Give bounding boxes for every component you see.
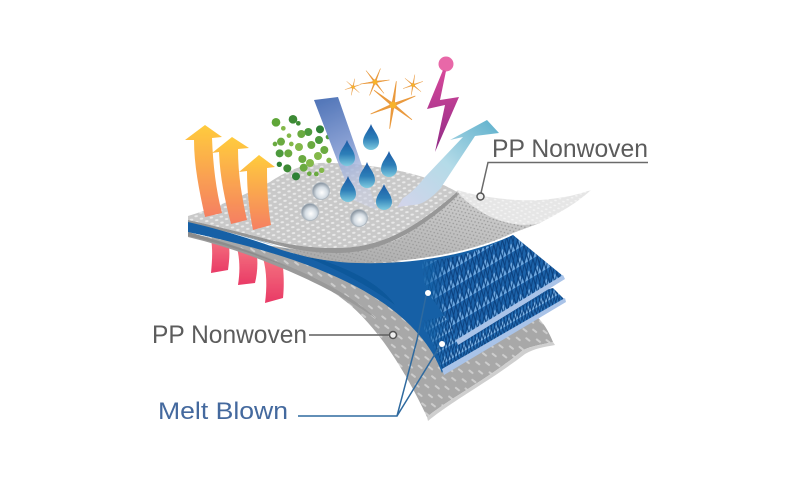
upper melt blown sheet	[423, 235, 565, 345]
icon: blue beam	[314, 97, 377, 210]
arrows: heat rising above the fabric	[185, 125, 275, 230]
callout: PP Nonwoven bottom	[152, 321, 396, 349]
icons: water drops	[339, 124, 397, 210]
lower melt blown sheet	[420, 288, 566, 375]
fold shadow band	[270, 192, 458, 253]
callout: PP Nonwoven bottom: PP Nonwoven	[152, 321, 307, 349]
turned-back flap	[457, 190, 591, 225]
top surface	[188, 163, 457, 248]
layer: melt blown blue	[188, 221, 566, 375]
layer: top PP nonwoven	[188, 163, 591, 276]
layer: bottom PP nonwoven	[188, 232, 555, 421]
icon: lightning bolt with static charge	[427, 56, 459, 152]
icons: water beads on surface	[302, 182, 368, 226]
callout: PP Nonwoven top	[477, 135, 648, 200]
icons: sparks	[344, 64, 424, 132]
artwork: all illustrated layers and icons	[185, 56, 591, 421]
arrow: breathable air going up	[397, 120, 499, 208]
callout: PP Nonwoven top: PP Nonwoven	[492, 135, 648, 163]
icon: bacteria particles	[272, 115, 332, 180]
arrows: heat rising below the fabric	[211, 239, 284, 303]
callout: Melt Blown: Melt Blown	[158, 398, 288, 425]
blue sheet base	[188, 221, 560, 373]
underside of the top sheet	[285, 191, 540, 262]
callout: Melt Blown	[158, 290, 445, 425]
